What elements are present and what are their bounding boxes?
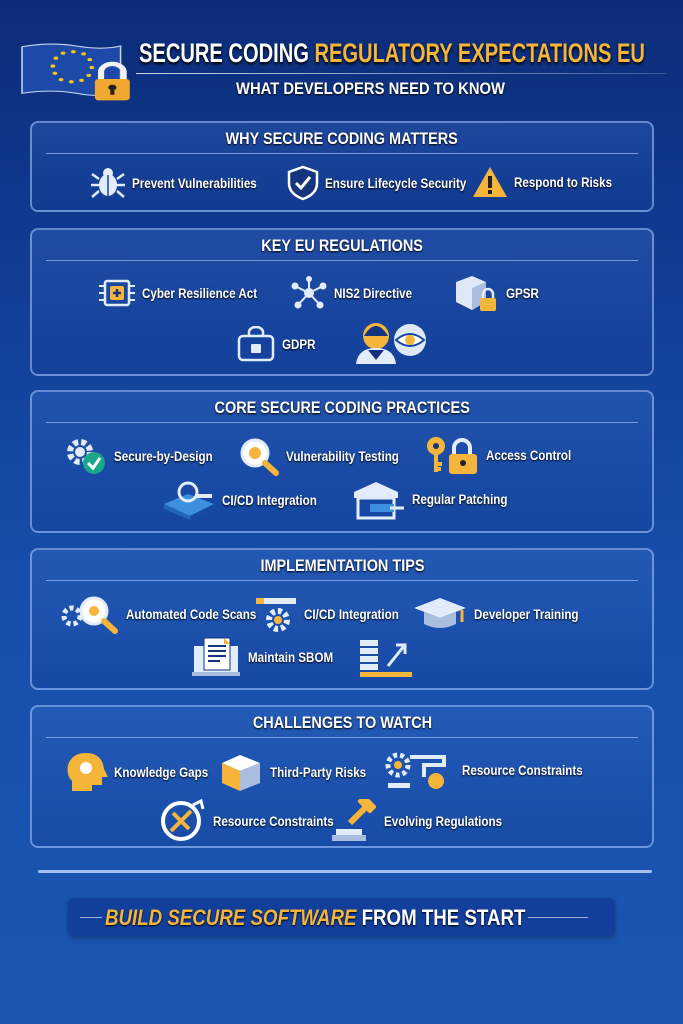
item: resource constraints: Resource Constraints <box>462 762 583 778</box>
item: CI/CD integration: CI/CD Integration <box>304 606 399 622</box>
item: secure-by-design: Secure-by-Design <box>114 448 213 464</box>
item: developer training <box>414 598 579 628</box>
panel: key EU regulations <box>30 228 654 376</box>
item: secure-by-design <box>67 439 214 474</box>
item: automated code scans <box>62 596 257 634</box>
item: developer training: Developer Training <box>474 606 579 622</box>
item: evolving regulations: Evolving Regulations <box>384 814 502 828</box>
item: respond to risks: Respond to Risks <box>514 174 612 190</box>
subtitle: WHAT DEVELOPERS NEED TO KNOW <box>236 79 505 98</box>
item: resource constraints <box>386 752 584 789</box>
item: prevent vulnerabilities <box>91 168 258 198</box>
icon: stack with upload <box>360 640 412 677</box>
title: SECURE CODING REGULATORY EXPECTATIONS EU <box>139 38 645 68</box>
panel: challenges to watch <box>30 705 654 848</box>
item: resource constraints 2 <box>161 799 334 841</box>
item: evolving regulations <box>332 799 503 841</box>
item: cyber resilience act <box>99 280 258 306</box>
panel: implementation tips <box>30 548 654 690</box>
item: respond to risks <box>473 167 613 197</box>
item: knowledge gaps: Knowledge Gaps <box>114 764 208 780</box>
item: CI/CD integration <box>164 482 318 520</box>
item: NIS2 directive <box>292 276 413 308</box>
icon: privacy person and eye <box>356 323 426 364</box>
item: CI/CD integration <box>256 598 400 632</box>
panel: implementation tips: IMPLEMENTATION TIPS <box>260 556 424 575</box>
panel: core secure coding practices <box>30 390 654 533</box>
item: prevent vulnerabilities: Prevent Vulnerabilities <box>132 176 257 190</box>
panel: key EU regulations: KEY EU REGULATIONS <box>261 236 423 255</box>
item: access control: Access Control <box>486 448 571 462</box>
panel: challenges to watch: CHALLENGES TO WATCH <box>252 713 432 732</box>
panel: why secure coding matters <box>30 121 654 212</box>
item: ensure lifecycle security: Ensure Lifecycle Security <box>325 176 466 190</box>
item: resource constraints 2: Resource Constraints <box>213 814 334 828</box>
CTA banner: BUILD SECURE SOFTWARE FROM THE START <box>105 905 525 930</box>
item: cyber resilience act: Cyber Resilience Act <box>142 286 257 300</box>
item: ensure lifecycle security <box>288 166 468 200</box>
item: GPSR: GPSR <box>506 286 539 300</box>
item: third-party risks <box>222 755 367 791</box>
item: knowledge gaps <box>68 753 209 791</box>
item: regular patching <box>354 482 508 520</box>
item: third-party risks: Third-Party Risks <box>270 764 366 780</box>
item: maintain SBOM: Maintain SBOM <box>248 650 333 664</box>
CTA banner <box>68 898 615 936</box>
item: access control <box>427 437 572 474</box>
item: CI/CD integration: CI/CD Integration <box>222 492 317 508</box>
item: GDPR: GDPR <box>282 336 316 352</box>
panel: core secure coding practices: CORE SECURE CODING PRACTICES <box>214 398 470 417</box>
item: GDPR <box>238 326 316 362</box>
item: vulnerability testing: Vulnerability Testing <box>286 448 399 464</box>
panel: why secure coding matters: WHY SECURE CODING MATTERS <box>226 129 458 148</box>
item: automated code scans: Automated Code Scans <box>126 606 256 622</box>
header: flag and lock icon <box>21 44 130 100</box>
item: vulnerability testing <box>240 438 400 476</box>
item: GPSR <box>456 276 540 311</box>
item: regular patching: Regular Patching <box>412 492 507 506</box>
item: NIS2 directive: NIS2 Directive <box>334 286 412 300</box>
item: maintain SBOM <box>192 638 334 676</box>
